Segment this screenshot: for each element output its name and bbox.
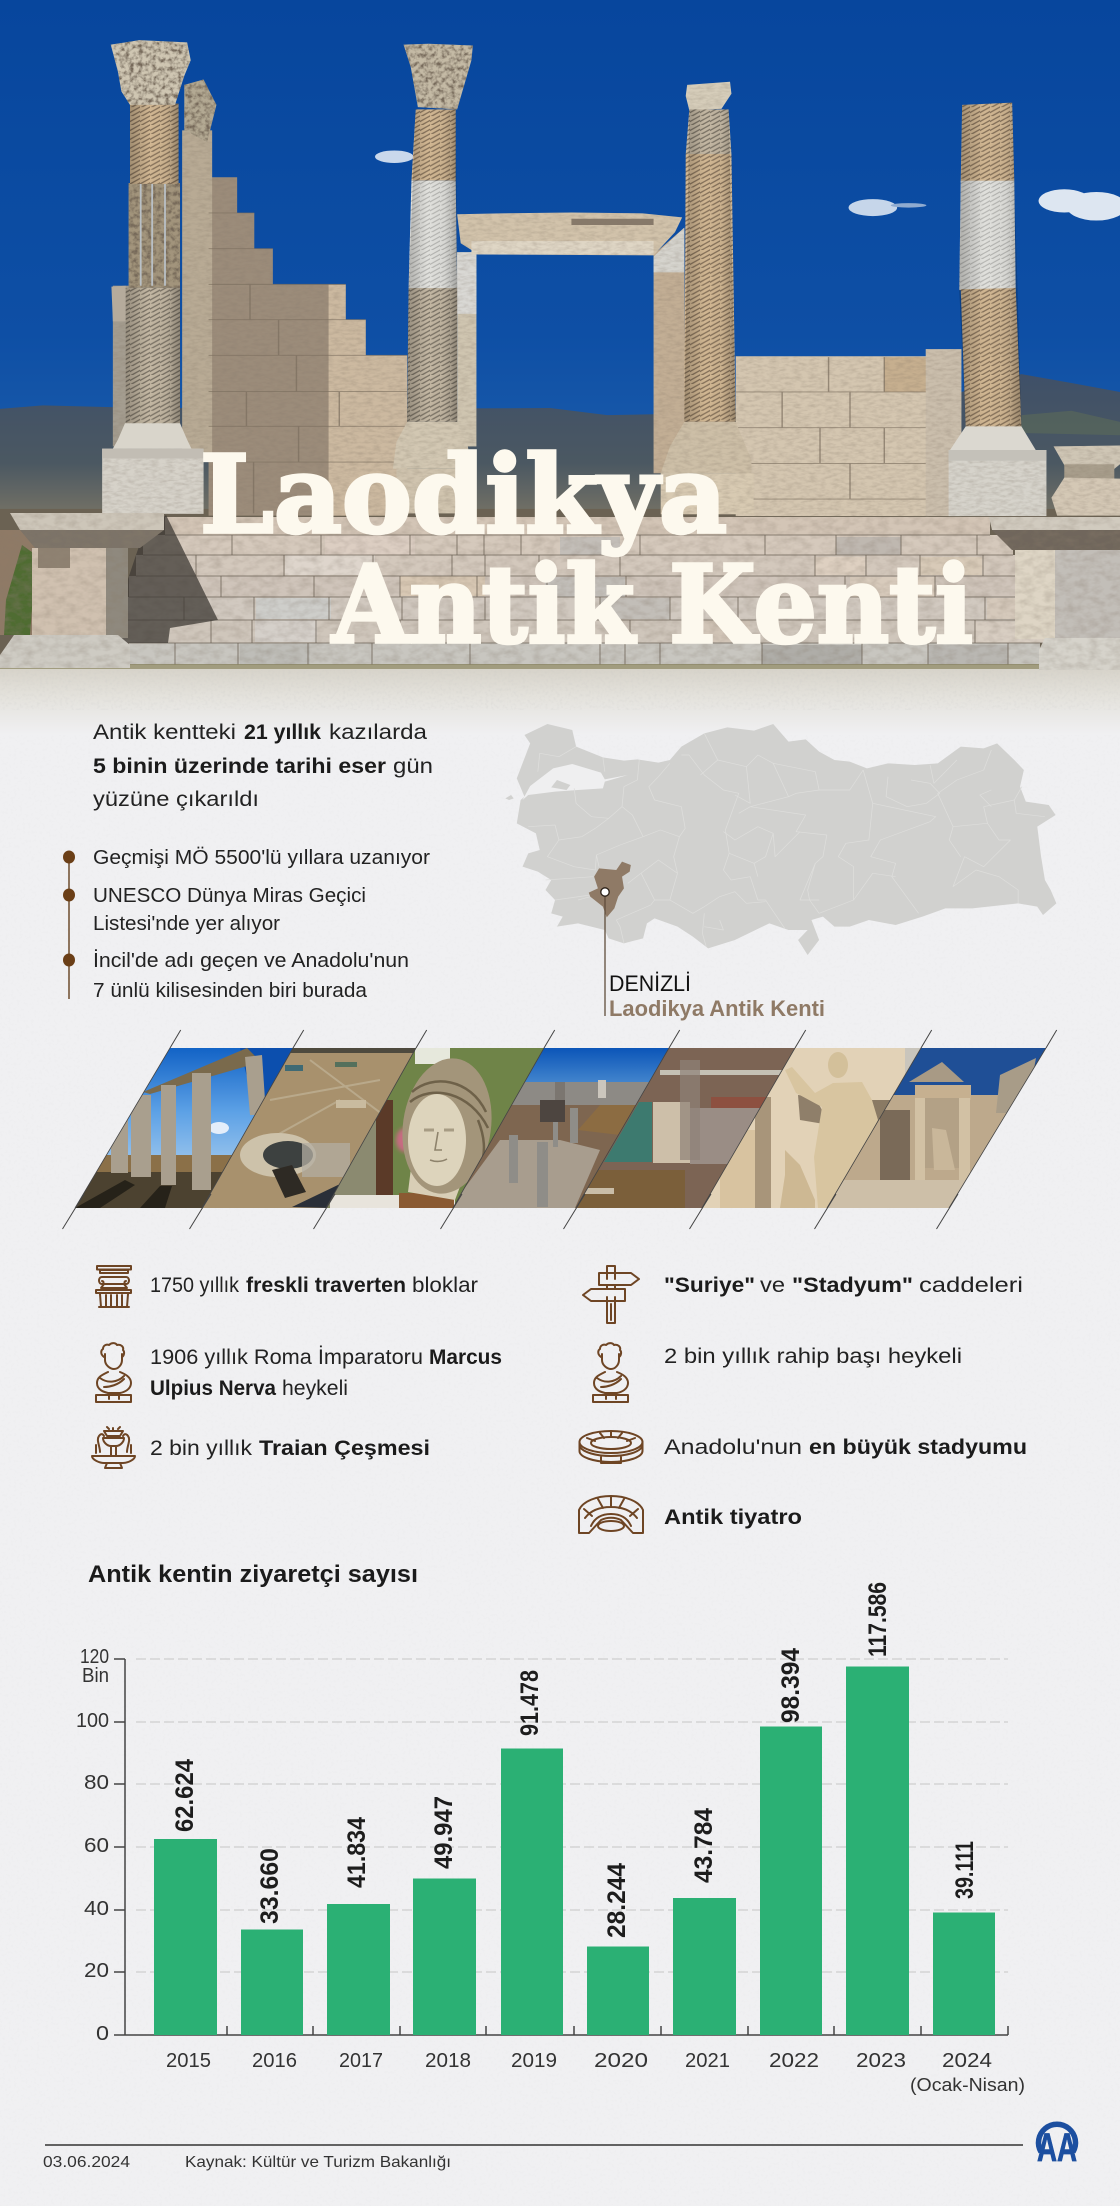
bullet 1: Geçmişi MÖ 5500'lü yıllara uzanıyor — [93, 847, 430, 869]
bars — [154, 1666, 995, 2035]
stairs — [118, 517, 1050, 665]
x axis labels: 2019 — [511, 2050, 557, 2072]
feature: largest stadium: en büyük stadyumu — [809, 1436, 1027, 1459]
chart title: Antik kentin ziyaretçi sayısı — [88, 1561, 418, 1588]
stair shadow — [118, 515, 218, 643]
small altar right — [1051, 446, 1120, 516]
grid — [136, 1659, 1008, 1972]
intro text — [93, 721, 433, 811]
feature: Marcus Ulpius Nerva: Marcus — [429, 1346, 502, 1369]
intro text: Antik kentteki — [93, 721, 236, 744]
feature: Syria and Stadium streets: "Suriye" — [664, 1274, 755, 1297]
feature: Marcus Ulpius Nerva: 1906 yıllık Roma İmparatoru — [150, 1346, 423, 1369]
feature: Trajan fountain: Traian Çeşmesi — [259, 1437, 430, 1460]
bullet 2: UNESCO Dünya Miras Geçici — [93, 885, 366, 907]
icon: stadium — [580, 1431, 642, 1463]
bullet 3: İncil'de adı geçen ve Anadolu'nun — [93, 949, 409, 972]
feature: Syria and Stadium streets: caddeleri — [919, 1274, 1023, 1297]
value labels: 62.624 — [171, 1759, 199, 1832]
y axis labels: 40 — [84, 1898, 109, 1920]
map callout: Denizli: DENİZLİ — [609, 971, 691, 996]
photo 1: columns against sky — [75, 1048, 295, 1208]
x axis labels: 2022 — [769, 2050, 819, 2072]
value labels: 41.834 — [343, 1817, 371, 1888]
left pedestal — [0, 513, 164, 668]
title — [200, 433, 973, 668]
feature: Syria and Stadium streets: "Stadyum" — [792, 1274, 913, 1297]
value labels: 91.478 — [516, 1670, 544, 1736]
feature: priest head — [593, 1343, 962, 1402]
y axis labels: 60 — [84, 1835, 109, 1857]
y axis labels: 20 — [84, 1960, 109, 1982]
title: Laodikya — [200, 433, 727, 558]
icon: bust — [593, 1343, 628, 1402]
feature: Marcus Ulpius Nerva — [96, 1343, 502, 1402]
value labels: 33.660 — [256, 1848, 284, 1924]
logo: AA — [1037, 2124, 1077, 2170]
feature: largest stadium: Anadolu'nun — [664, 1436, 802, 1459]
icon: theatre — [579, 1496, 643, 1533]
axes — [114, 1659, 1008, 2035]
value labels — [171, 1582, 979, 1938]
x axis labels: 2018 — [425, 2050, 471, 2072]
hero photo: temple ruins — [0, 0, 1120, 735]
intro text: 5 binin üzerinde tarihi eser — [93, 755, 386, 778]
bullet 2 — [63, 885, 366, 935]
value labels: 39.111 — [951, 1841, 979, 1899]
feature: largest stadium — [580, 1431, 1027, 1463]
y axis labels: 80 — [84, 1772, 109, 1794]
feature: travertine blocks: bloklar — [412, 1274, 478, 1297]
x axis labels: 2023 — [856, 2050, 906, 2072]
logo: AA: AA — [1037, 2126, 1077, 2170]
intro text: gün — [393, 755, 433, 778]
intro text: yüzüne çıkarıldı — [93, 788, 259, 811]
x axis labels: (Ocak-Nisan) — [910, 2075, 1025, 2095]
bullet 3: 7 ünlü kilisesinden biri burada — [93, 980, 368, 1002]
value labels: 117.586 — [864, 1582, 892, 1657]
column 1 — [102, 40, 216, 514]
feature: travertine blocks: freskli traverten — [246, 1274, 406, 1297]
x axis labels: 2017 — [339, 2050, 383, 2072]
value labels: 98.394 — [777, 1648, 805, 1723]
clouds — [375, 150, 1120, 221]
province borders — [528, 733, 1045, 947]
photo 5: aerial excavation — [575, 1048, 800, 1208]
feature: priest head: 2 bin yıllık rahip başı heykeli — [664, 1345, 962, 1368]
right pedestal — [989, 517, 1120, 670]
feature: Trajan fountain: 2 bin yıllık — [150, 1437, 253, 1460]
icon: bust — [96, 1343, 131, 1402]
feature: Marcus Ulpius Nerva: heykeli — [282, 1377, 348, 1400]
value labels: 28.244 — [603, 1863, 631, 1938]
ground — [0, 665, 1120, 735]
separators — [62, 1030, 1057, 1229]
photo 2: aerial theatre — [200, 1048, 420, 1208]
bullet 2: Listesi'nde yer alıyor — [93, 913, 280, 935]
feature: Trajan fountain — [92, 1427, 430, 1468]
bar chart: visitors — [76, 1582, 1025, 2095]
icon: fountain — [92, 1427, 135, 1468]
x axis labels: 2015 — [166, 2050, 211, 2072]
icon: signpost — [583, 1266, 639, 1323]
photo 6: emperor statue — [700, 1048, 925, 1208]
x axis labels: 2016 — [252, 2050, 297, 2072]
photo 4: colonnaded street — [450, 1048, 675, 1208]
value labels: 43.784 — [690, 1808, 718, 1883]
y axis labels: 100 — [76, 1710, 109, 1732]
intro text: 21 yıllık — [244, 721, 321, 744]
footer — [43, 2124, 1077, 2171]
intro text: kazılarda — [329, 721, 427, 744]
mountains — [0, 374, 1120, 522]
icon: column capital — [96, 1266, 131, 1307]
Denizli province — [589, 862, 631, 917]
x axis labels: 2021 — [685, 2050, 730, 2072]
y axis labels — [76, 1646, 109, 2045]
photo 7: reconstructed facade — [825, 1048, 1050, 1208]
column 3 — [661, 82, 754, 514]
bullet list — [63, 847, 430, 1002]
title: Antik Kenti — [331, 543, 973, 668]
feature: travertine blocks: 1750 yıllık — [150, 1274, 239, 1297]
date: 03.06.2024 — [43, 2154, 130, 2171]
photo 3: marble head — [320, 1048, 550, 1208]
x axis labels: 2024 — [942, 2050, 992, 2072]
y axis labels: Bin — [82, 1665, 109, 1687]
column 4 — [949, 103, 1046, 516]
feature: ancient theatre — [579, 1496, 802, 1533]
map of Turkey — [505, 724, 1056, 955]
photo strip — [62, 1030, 1057, 1229]
map callout: Denizli: Laodikya Antik Kenti — [609, 996, 825, 1021]
feature: ancient theatre: Antik tiyatro — [664, 1506, 802, 1529]
x axis labels — [166, 2050, 1025, 2095]
value labels: 49.947 — [430, 1796, 458, 1869]
feature: Syria and Stadium streets — [583, 1266, 1023, 1323]
wall and piers — [113, 130, 961, 516]
feature: Syria and Stadium streets: ve — [760, 1274, 785, 1297]
source: Kaynak: Kültür ve Turizm Bakanlığı — [185, 2154, 451, 2171]
map callout: Denizli — [601, 888, 825, 1021]
column 2 — [393, 44, 475, 513]
bullet 3 — [63, 949, 409, 1002]
y axis labels: 0 — [96, 2023, 109, 2045]
feature: travertine blocks — [96, 1266, 478, 1307]
y axis labels: 120 — [80, 1646, 109, 1668]
x axis labels: 2020 — [594, 2050, 648, 2072]
feature: Marcus Ulpius Nerva: Ulpius Nerva — [150, 1377, 276, 1400]
